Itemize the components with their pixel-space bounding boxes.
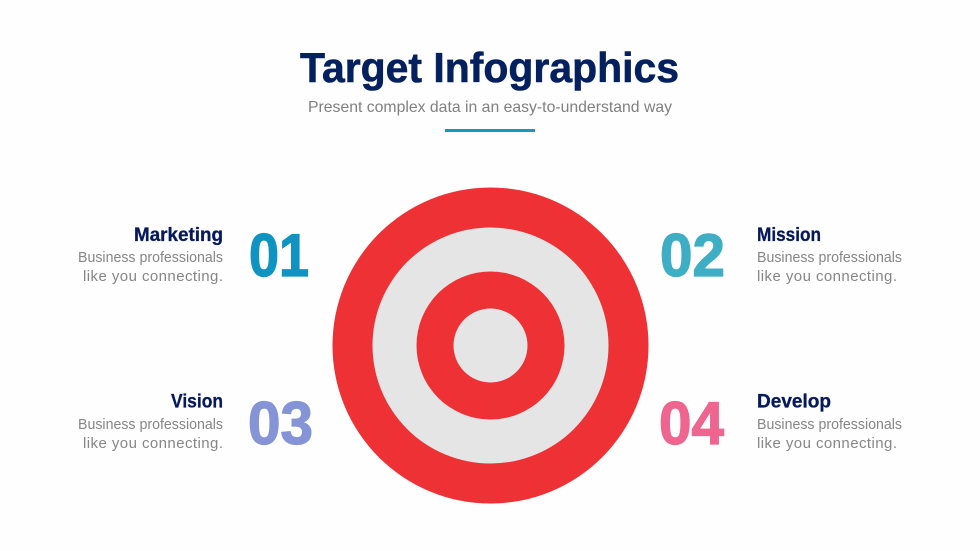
item 04: Develop xyxy=(659,390,902,457)
body text: Develop xyxy=(757,416,902,452)
body text: Mission: Business professionals xyxy=(757,249,902,266)
body text: Develop: like you connecting. xyxy=(757,435,897,452)
item 01: Marketing xyxy=(78,222,309,289)
target bullseye xyxy=(332,188,648,504)
subtitle: Present complex data in an easy-to-understand way xyxy=(308,99,672,116)
accent underline xyxy=(445,129,535,132)
number 04: 04 xyxy=(659,390,725,457)
heading: Develop: Develop xyxy=(757,392,831,412)
heading: Vision: Vision xyxy=(171,392,223,412)
number 03: 03 xyxy=(248,390,313,457)
heading: Mission: Mission xyxy=(757,225,821,246)
body text: Develop: Business professionals xyxy=(757,416,902,433)
body text: Mission: like you connecting. xyxy=(757,268,897,285)
body text: Marketing xyxy=(78,249,223,285)
item 03: Vision xyxy=(78,390,313,457)
body text: Vision: like you connecting. xyxy=(83,435,223,452)
item 02: Mission xyxy=(660,222,902,289)
body text: Marketing: like you connecting. xyxy=(83,268,223,285)
number 02: 02 xyxy=(660,222,725,289)
body text: Vision xyxy=(78,416,223,452)
body text: Vision: Business professionals xyxy=(78,416,223,433)
title: Target Infographics xyxy=(300,44,679,91)
heading: Marketing: Marketing xyxy=(134,225,223,246)
body text: Marketing: Business professionals xyxy=(78,249,223,266)
number 01: 01 xyxy=(249,222,309,289)
body text: Mission xyxy=(757,249,902,285)
